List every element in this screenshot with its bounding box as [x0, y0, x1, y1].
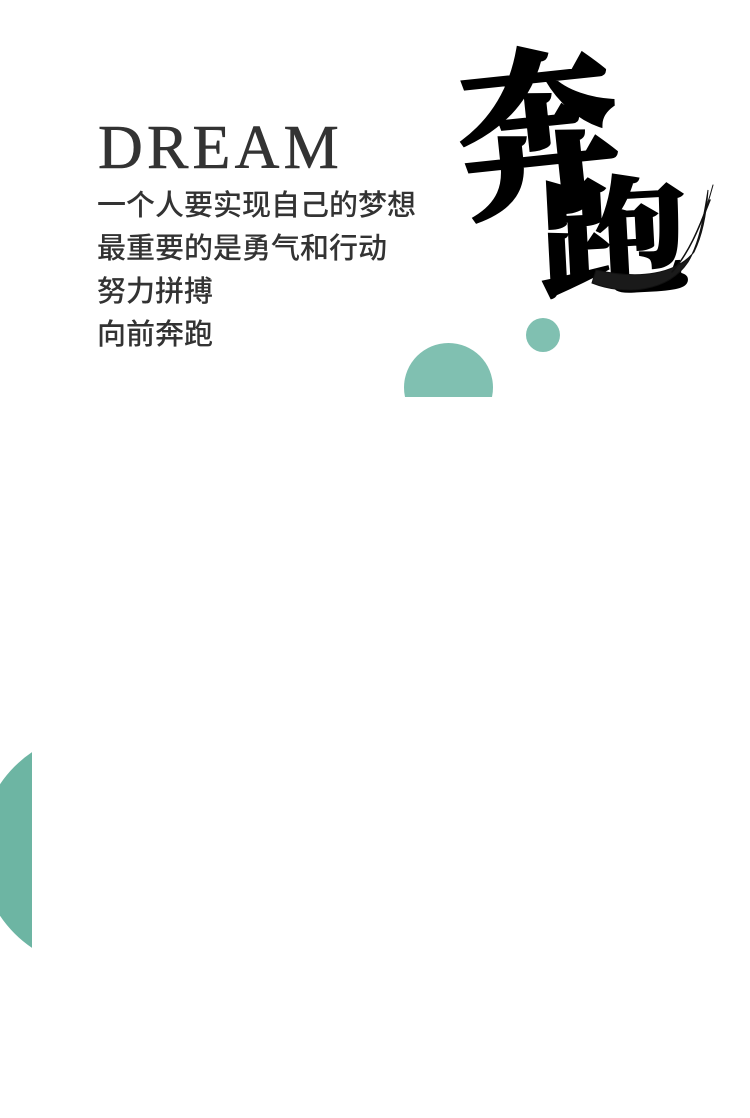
- calligraphy title: 奔跑: [445, 0, 693, 325]
- text block: slogan: 最重要的是勇气和行动: [97, 233, 387, 265]
- text block: slogan: 向前奔跑: [97, 319, 213, 351]
- text block: slogan: 努力拼搏: [97, 276, 213, 308]
- decorative circles and calligraphy artwork: [0, 46, 714, 948]
- text block: slogan: 一个人要实现自己的梦想: [97, 190, 416, 222]
- teal semicircle: [404, 343, 493, 397]
- calligraphy character: 跑: 跑: [534, 133, 693, 325]
- small teal circle: [526, 318, 560, 352]
- text block: slogan: [97, 190, 416, 351]
- title: DREAM: DREAM: [98, 114, 343, 182]
- brush tail flourish: [592, 185, 713, 290]
- left teal circle segment: [0, 752, 32, 948]
